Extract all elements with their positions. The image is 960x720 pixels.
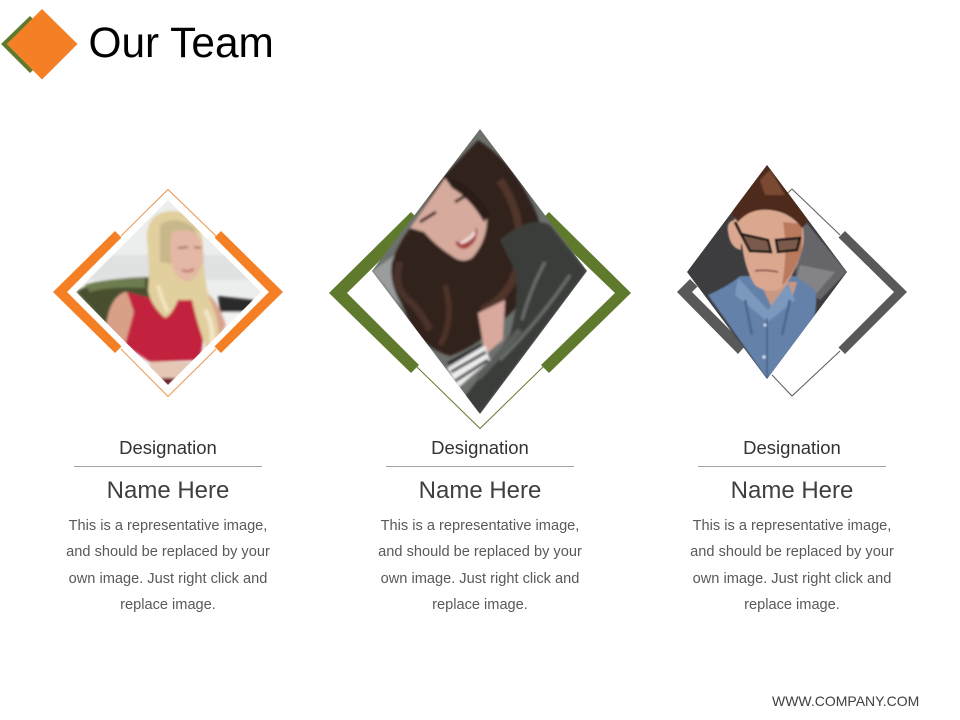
name: Name Here (107, 476, 229, 504)
photo: man with glasses (687, 165, 847, 379)
description text: replace image. (120, 597, 216, 613)
left bracket (53, 231, 122, 353)
panel: team member 3 (677, 165, 907, 613)
description text: This is a representative image, (381, 518, 579, 534)
designation label: Designation (119, 437, 217, 458)
designation label: Designation (743, 437, 841, 458)
title: Our Team (88, 19, 274, 66)
description text: own image. Just right click and (69, 571, 267, 587)
portrait graphic with green frame (329, 129, 631, 430)
panel: team member 2 (329, 129, 631, 613)
thin diamond outline (121, 190, 216, 236)
name: Name Here (731, 476, 853, 504)
description text: and should be replaced by your (66, 544, 270, 560)
footer website: WWW.COMPANY.COM (772, 693, 919, 709)
left bracket (329, 212, 420, 373)
portrait graphic with orange frame (53, 188, 283, 398)
left bracket (677, 279, 746, 354)
description text: own image. Just right click and (693, 571, 891, 587)
description text: and should be replaced by your (690, 544, 894, 560)
photo: woman in red top (76, 200, 261, 385)
description text: own image. Just right click and (381, 571, 579, 587)
portrait graphic with grey frame (677, 165, 907, 397)
right bracket (214, 231, 283, 353)
description text: replace image. (432, 597, 528, 613)
title icon: overlapping diamonds (1, 9, 78, 80)
name: Name Here (419, 476, 541, 504)
description text: This is a representative image, (69, 518, 267, 534)
thin diamond outline (780, 189, 840, 235)
description text: and should be replaced by your (378, 544, 582, 560)
right bracket (540, 212, 631, 373)
description text: This is a representative image, (693, 518, 891, 534)
description text (690, 518, 894, 613)
description text (378, 518, 582, 613)
panel: team member 1 (53, 188, 283, 613)
photo: smiling woman with dark hair (365, 125, 590, 420)
thin diamond outline (417, 367, 543, 428)
description text: replace image. (744, 597, 840, 613)
description text (66, 518, 270, 613)
designation label: Designation (431, 437, 529, 458)
right bracket (838, 231, 907, 354)
